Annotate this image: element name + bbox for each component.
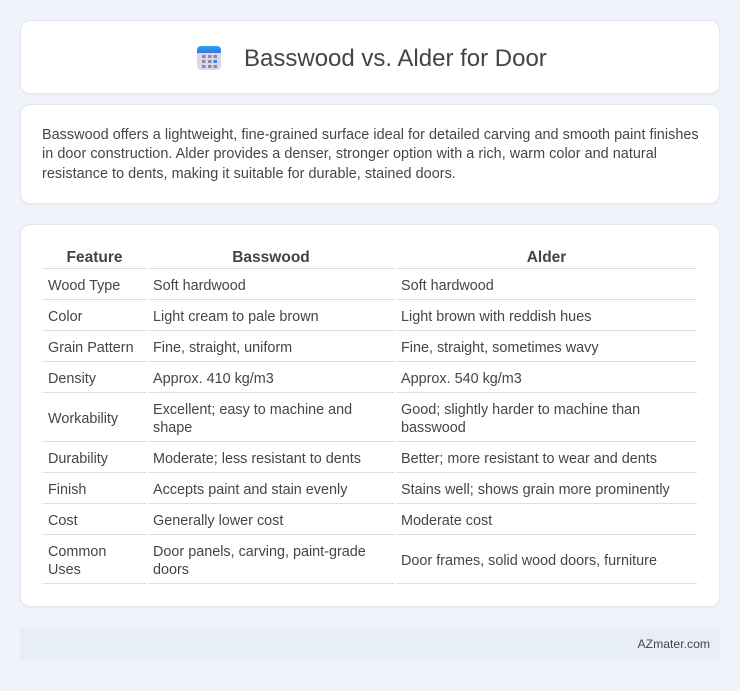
- row: common uses: Common: [48, 544, 106, 560]
- row: workability: [43, 402, 697, 442]
- row: cost: Moderate cost: [401, 513, 492, 529]
- row: wood type: Soft hardwood: [153, 278, 246, 294]
- panel: intro text: [20, 104, 720, 204]
- row: density: Approx. 410 kg/m3: [153, 371, 274, 387]
- row: durability: Better; more resistant to wear and dents: [401, 451, 657, 467]
- comparison table: [43, 249, 697, 584]
- footer credit: AZmater.com: [638, 637, 710, 651]
- row: durability: Durability: [48, 451, 108, 467]
- row: color: Color: [48, 309, 82, 325]
- panel: comparison table: [20, 224, 720, 607]
- row: common uses: Door frames, solid wood doors, furniture: [401, 553, 657, 569]
- row: finish: [43, 482, 697, 504]
- row: density: Density: [48, 371, 96, 387]
- title: Basswood vs. Alder for Door: [244, 45, 547, 72]
- row: wood type: [43, 278, 697, 300]
- row: color: Light cream to pale brown: [153, 309, 319, 325]
- row: color: Light brown with reddish hues: [401, 309, 591, 325]
- row: density: [43, 371, 697, 393]
- table header: Basswood: [232, 249, 310, 266]
- row: durability: [43, 451, 697, 473]
- row: workability: shape: [153, 420, 192, 436]
- row: workability: basswood: [401, 420, 466, 436]
- row: grain pattern: Fine, straight, sometimes wavy: [401, 340, 599, 356]
- intro paragraph: resistance to dents, making it suitable for durable, stained doors.: [42, 166, 456, 182]
- row: cost: [43, 513, 697, 535]
- table header: [43, 249, 697, 269]
- row: grain pattern: Fine, straight, uniform: [153, 340, 292, 356]
- icon: calendar: [197, 46, 221, 70]
- row: common uses: Uses: [48, 562, 81, 578]
- footer bar: [20, 627, 720, 661]
- row: workability: Good; slightly harder to machine than: [401, 402, 640, 418]
- table header: Feature: [66, 249, 122, 266]
- panel: title card: [20, 20, 720, 94]
- row: cost: Generally lower cost: [153, 513, 283, 529]
- row: workability: Workability: [48, 411, 118, 427]
- table header: Alder: [527, 249, 566, 266]
- row: density: Approx. 540 kg/m3: [401, 371, 522, 387]
- row: workability: Excellent; easy to machine and: [153, 402, 352, 418]
- row: durability: Moderate; less resistant to dents: [153, 451, 361, 467]
- intro paragraph: [42, 127, 699, 182]
- row: finish: Stains well; shows grain more prominently: [401, 482, 670, 498]
- row: common uses: [43, 544, 697, 584]
- row: wood type: Soft hardwood: [401, 278, 494, 294]
- row: finish: Accepts paint and stain evenly: [153, 482, 347, 498]
- intro paragraph: Basswood offers a lightweight, fine-grained surface ideal for detailed carving and smooth paint finishes: [42, 127, 699, 143]
- row: cost: Cost: [48, 513, 78, 529]
- row: grain pattern: [43, 340, 697, 362]
- row: common uses: Door panels, carving, paint-grade: [153, 544, 366, 560]
- row: wood type: Wood Type: [48, 278, 120, 294]
- row: common uses: doors: [153, 562, 189, 578]
- row: finish: Finish: [48, 482, 86, 498]
- row: grain pattern: Grain Pattern: [48, 340, 134, 356]
- row: color: [43, 309, 697, 331]
- intro paragraph: in door construction. Alder provides a denser, stronger option with a rich, warm color and natural: [42, 146, 657, 162]
